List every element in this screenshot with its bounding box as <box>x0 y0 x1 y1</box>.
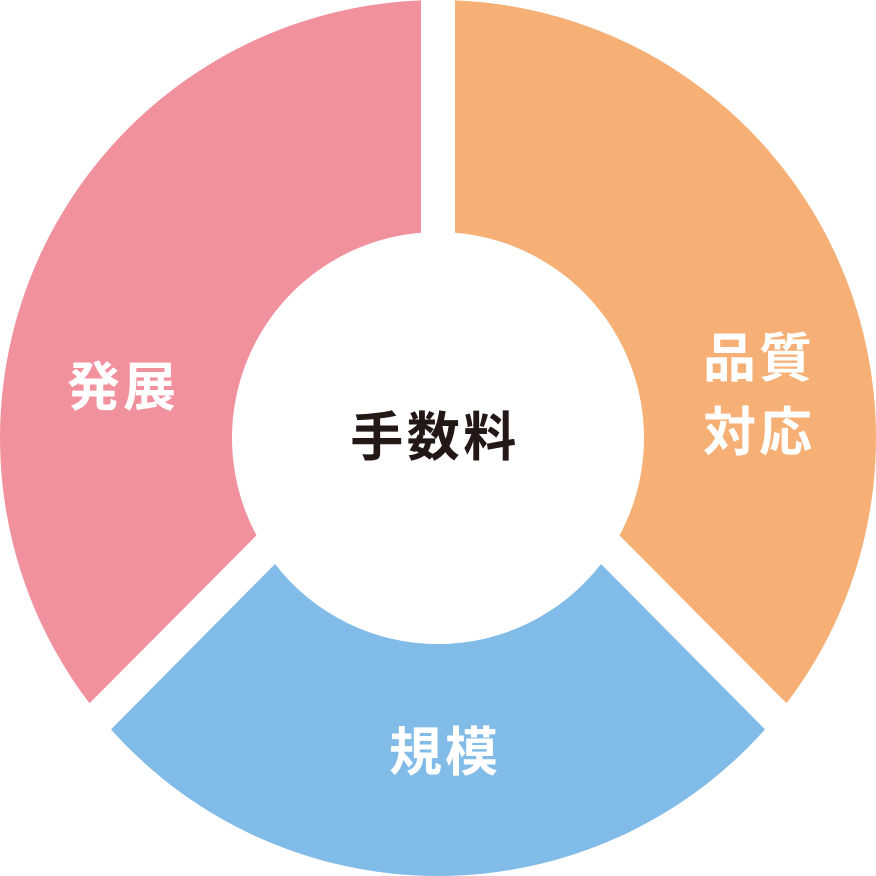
label: quality line 2: 対応 <box>703 404 815 462</box>
label: development: 発展 <box>67 358 179 418</box>
segment: scale (blue) <box>111 564 765 876</box>
segment: development (pink) <box>0 0 421 703</box>
segment: quality (orange) <box>455 0 876 703</box>
label: quality line 1: 品質 <box>703 330 815 388</box>
label: scale: 規模 <box>389 724 501 782</box>
center label: fee: 手数料 <box>350 408 520 468</box>
